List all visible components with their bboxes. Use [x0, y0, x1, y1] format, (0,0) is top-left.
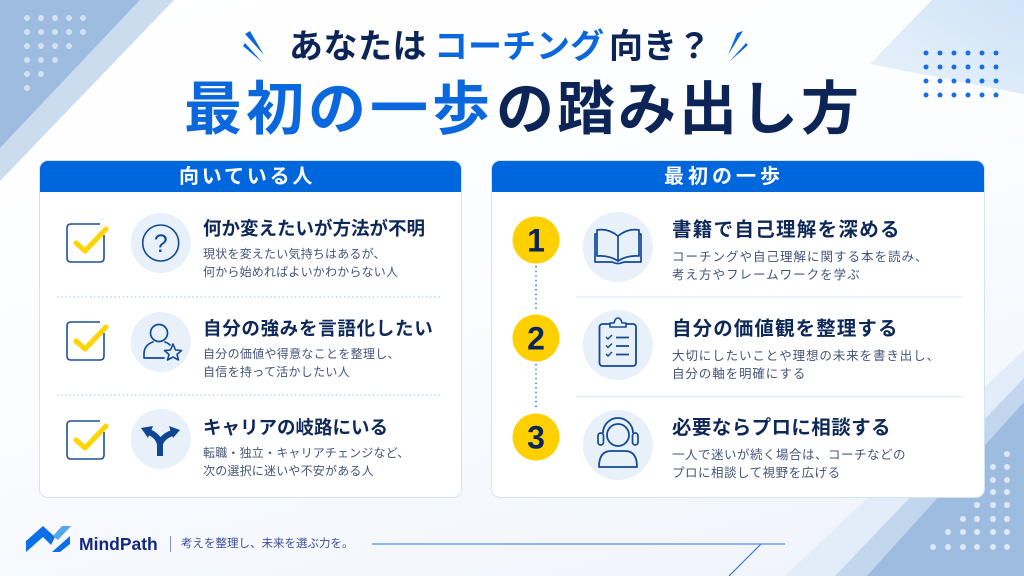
title line 1: [289, 28, 711, 66]
icon: right spark: [728, 31, 748, 62]
title line 2: [184, 77, 862, 142]
text: step 2: [672, 318, 940, 381]
heading: 書籍で自己理解を深める: [672, 219, 901, 241]
icon: checkbox 3: [66, 420, 108, 460]
logo mark: [26, 526, 71, 552]
icon: person with star: [130, 312, 191, 372]
panel: 最初の一歩: [491, 160, 985, 498]
description: [203, 446, 410, 478]
panel: 向いている人: [39, 160, 462, 498]
title line 1: あなたは: [289, 28, 427, 66]
panel heading: 最初の一歩: [664, 166, 784, 188]
step number 2: [512, 314, 560, 362]
description: 一人で迷いが続く場合は、コーチなどの: [672, 448, 906, 462]
icon: checkbox 1: [66, 223, 108, 263]
icon: clipboard checklist: [582, 310, 653, 380]
text: row 3 left: [203, 417, 410, 478]
icon: headset person: [582, 410, 653, 480]
description: 大切にしたいことや理想の未来を書き出し、: [672, 349, 940, 363]
text: row 2 left: 自信を持って活かしたい人: [203, 364, 350, 378]
text: step 3: プロに相談して視野を広げる: [672, 466, 841, 480]
heading: 必要ならプロに相談する: [672, 417, 891, 439]
description: 自分の価値や得意なことを整理し、: [203, 346, 400, 360]
description: [203, 247, 398, 279]
step number 3: [512, 414, 560, 460]
description: 現状を変えたい気持ちはあるが、: [203, 247, 386, 261]
title line 2: の踏み出し方: [496, 77, 862, 142]
title line 1: コーチング: [434, 28, 604, 66]
text: step 1: 考え方やフレームワークを学ぶ: [672, 268, 861, 282]
description: [672, 349, 940, 381]
heading: 自分の強みを言語化したい: [203, 318, 433, 339]
description: コーチングや自己理解に関する本を読み、: [672, 250, 929, 264]
text: step 3: [672, 417, 906, 480]
icon: left spark: [243, 31, 264, 62]
title line 1: 向き？: [609, 28, 711, 66]
icon: checkbox 2: [66, 321, 108, 361]
text: row 3 left: 次の選択に迷いや不安がある人: [203, 464, 374, 478]
step number 1: 1: [527, 222, 545, 258]
text: step 1: [672, 219, 929, 282]
panel header bar: [39, 160, 462, 192]
text: step 2: 自分の軸を明確にする: [672, 367, 806, 381]
heading: 何か変えたいが方法が不明: [203, 218, 425, 239]
panel header bar: [491, 160, 985, 192]
brand name: MindPath: [79, 534, 158, 554]
description: 転職・独立・キャリアチェンジなど、: [203, 446, 410, 460]
heading: キャリアの岐路にいる: [203, 417, 388, 438]
description: [672, 250, 929, 282]
panel heading: 向いている人: [179, 166, 315, 188]
text: row 1 left: [203, 218, 425, 279]
icon: fork arrows: [130, 409, 191, 469]
title: [184, 28, 862, 142]
step number 3: 3: [527, 420, 545, 456]
text: row 2 left: [203, 318, 433, 378]
icon: open book: [582, 212, 653, 282]
footer tagline: 考えを整理し、未来を選ぶ力を。: [181, 538, 354, 550]
step number 2: 2: [527, 320, 545, 356]
text: row 1 left: 何から始めればよいかわからない人: [203, 265, 398, 279]
description: [672, 448, 906, 480]
description: [203, 346, 400, 378]
step number 1: [512, 216, 560, 264]
icon: question circle: [130, 213, 191, 273]
heading: 自分の価値観を整理する: [672, 318, 899, 340]
title line 2: 最初の一歩: [184, 77, 494, 142]
icon: question circle: ?: [154, 230, 168, 258]
